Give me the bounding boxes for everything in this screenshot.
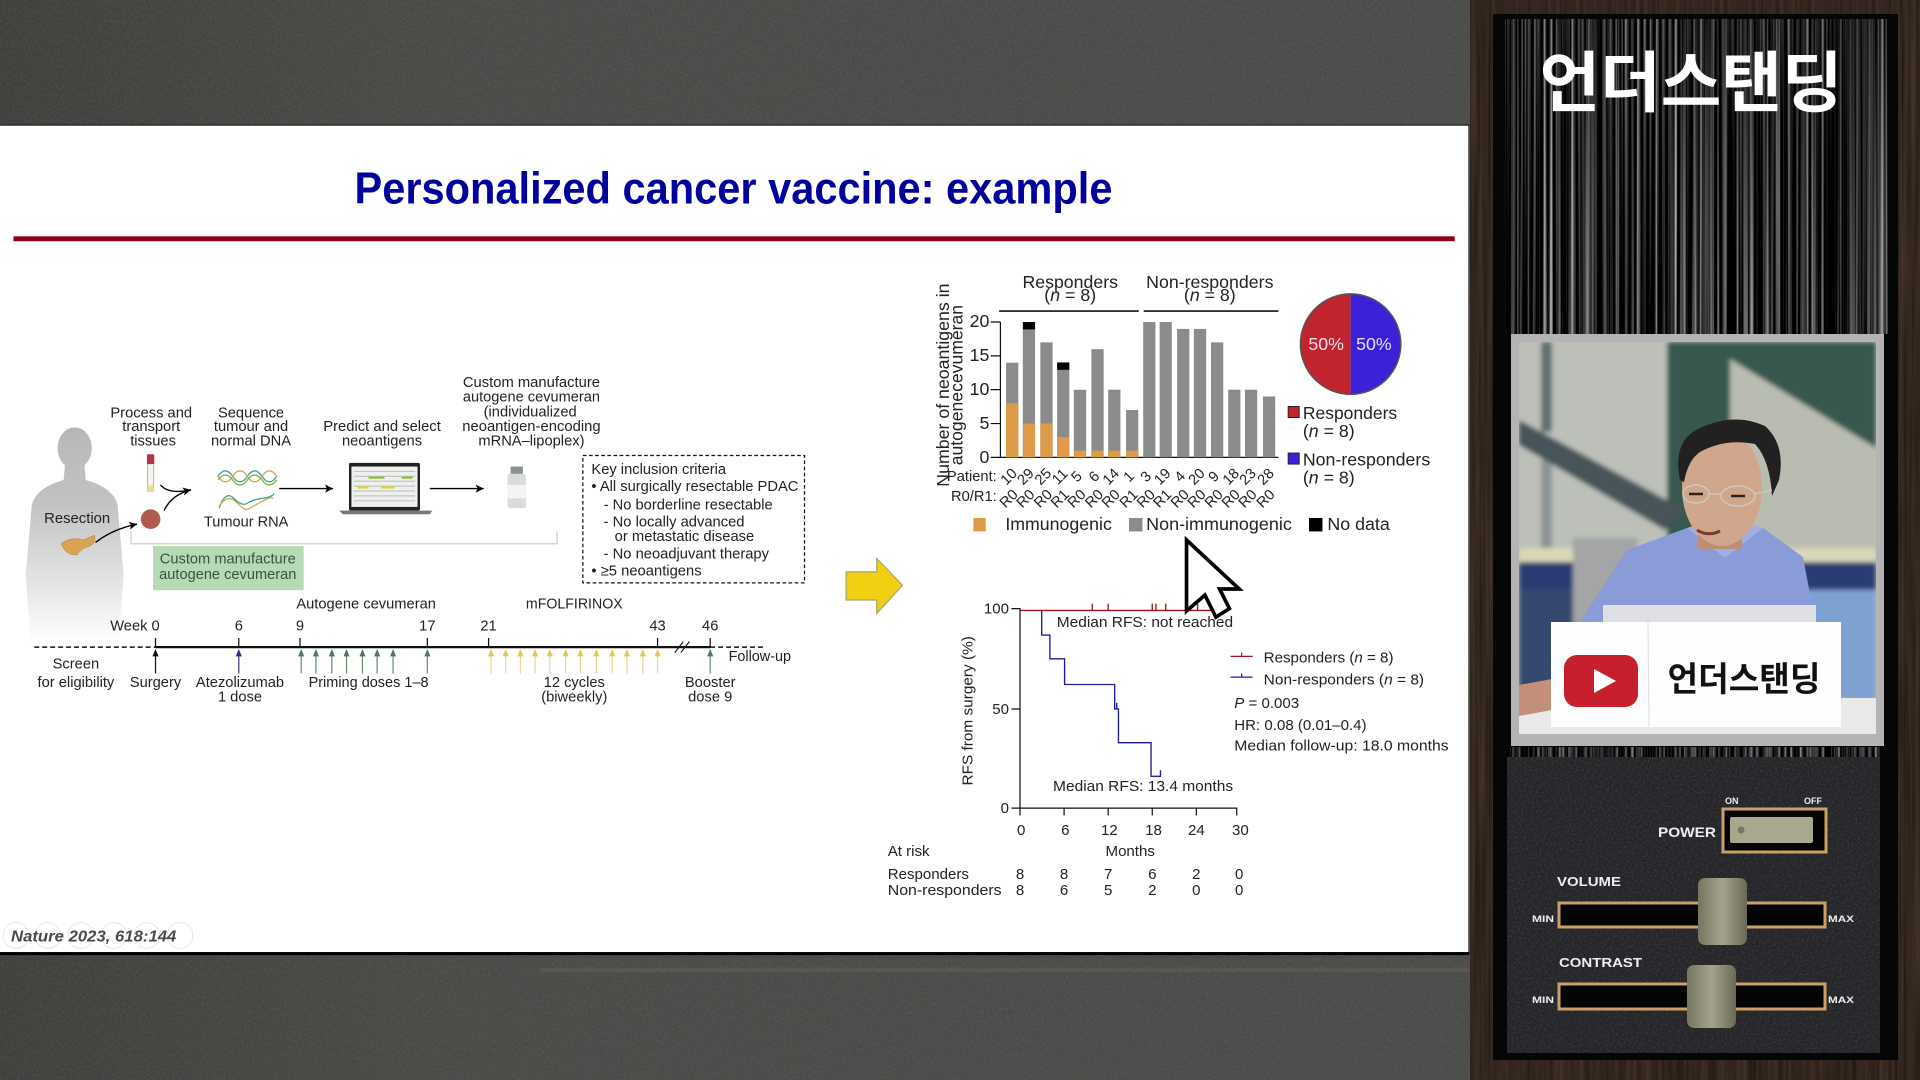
- week labels: 21: [480, 619, 497, 635]
- presenter: [1580, 419, 1813, 625]
- at-risk table: 6: [1060, 882, 1068, 899]
- icon: pancreas: [61, 535, 95, 555]
- patient labels: 5: [1069, 469, 1086, 486]
- week labels: [110, 619, 718, 635]
- decoration: lower grille: [1507, 747, 1880, 757]
- patient labels: 29: [1015, 466, 1038, 489]
- patient labels: Patient:: [947, 469, 997, 485]
- curve legend and statistics: P = 0.003: [1234, 695, 1299, 712]
- patient labels: 18: [1220, 466, 1243, 489]
- at-risk table: Months: [1106, 843, 1155, 860]
- curve annotations: [1053, 614, 1233, 795]
- at-risk table: 7: [1104, 866, 1112, 883]
- resection margin labels: R0: [1202, 487, 1227, 512]
- at-risk table: 2: [1192, 866, 1201, 883]
- volume slider: [1532, 874, 1855, 945]
- power switch: OFF: [1804, 796, 1822, 806]
- label: sequence: Sequence: [218, 406, 284, 422]
- at-risk table: 5: [1104, 882, 1112, 899]
- label: custom manufacture: (individualized: [484, 404, 577, 420]
- resection margin labels: R0: [1065, 487, 1089, 512]
- axis numbers: 18: [1145, 822, 1162, 839]
- at-risk table: 8: [1016, 866, 1024, 883]
- panel: presentation slide: [0, 125, 1469, 955]
- arrow: resection to tissue: [96, 524, 137, 542]
- group headers: Responders: [1022, 272, 1118, 292]
- label: sequence: tumour and: [214, 419, 288, 435]
- patient labels: 11: [1049, 466, 1071, 488]
- patient labels: 3: [1138, 469, 1155, 486]
- axis numbers: 100: [984, 600, 1009, 617]
- panel: webcam video frame: [1511, 334, 1884, 746]
- label: custom manufacture: [462, 375, 601, 450]
- label: process and transport: [110, 406, 192, 450]
- callout: key inclusion criteria: - No neoadjuvant therapy: [604, 546, 770, 562]
- panel: treatment workflow diagram: [26, 375, 804, 643]
- arrow: laptop to vial: [430, 488, 484, 490]
- icon: vaccine vial: [508, 467, 526, 508]
- bars: immunogenic: [1006, 403, 1138, 457]
- resection margin labels: R0: [1031, 487, 1056, 512]
- callout: key inclusion criteria: or metastatic disease: [615, 529, 754, 545]
- drug labels: mFOLFIRINOX: [526, 597, 623, 613]
- callout: custom manufacture box: Custom manufacture: [160, 551, 296, 567]
- label: tumour RNA: Tumour RNA: [204, 515, 289, 531]
- volume slider: MIN: [1532, 914, 1554, 925]
- week labels: 46: [702, 619, 718, 635]
- decoration: speaker grille: [1505, 19, 1888, 334]
- label: sequence: normal DNA: [211, 434, 291, 450]
- resection margin labels: R1: [1151, 487, 1175, 512]
- resection margin labels: [951, 487, 1279, 512]
- group headers: [999, 272, 1278, 311]
- patient labels: 1: [1121, 469, 1138, 486]
- bracket: manufacture span: [131, 531, 557, 544]
- background: dark slate wall: [0, 0, 1480, 1080]
- week labels: 17: [419, 619, 436, 635]
- at-risk table: At risk: [888, 843, 930, 860]
- label: custom manufacture: autogene cevumeran: [463, 390, 600, 406]
- resection margin labels: R0: [1254, 487, 1279, 512]
- drug labels: Autogene cevumeran: [296, 597, 436, 613]
- callout: key inclusion criteria: • All surgically resectable PDAC: [591, 479, 799, 495]
- icon: blood tube: [147, 454, 154, 492]
- non-responders curve: [1042, 611, 1160, 776]
- at-risk table: 0: [1235, 882, 1243, 899]
- y-axis title: Number of neoantigens in: [933, 283, 953, 487]
- y-axis: 15: [970, 345, 990, 365]
- timeline step labels: Priming doses 1–8: [309, 675, 429, 691]
- patient labels: 28: [1255, 466, 1278, 489]
- axis numbers: 0: [1001, 800, 1009, 817]
- curve legend and statistics: HR: 0.08 (0.01–0.4): [1234, 717, 1367, 734]
- pie legend: (n = 8): [1303, 421, 1355, 441]
- group headers: Non-responders: [1146, 272, 1274, 292]
- contrast slider: [1532, 955, 1855, 1028]
- patient labels: 9: [1206, 469, 1223, 486]
- power switch: [1658, 796, 1826, 852]
- patient labels: 14: [1100, 466, 1123, 489]
- resection margin labels: R0: [1134, 487, 1159, 512]
- axis numbers: 24: [1188, 822, 1205, 839]
- contrast slider: MAX: [1828, 995, 1855, 1006]
- timeline step labels: 12 cycles: [544, 675, 605, 691]
- label: process and transport: transport: [122, 419, 180, 435]
- drug labels: [296, 597, 623, 613]
- callout: custom manufacture box: [153, 546, 304, 590]
- patient labels: 25: [1032, 466, 1055, 489]
- at-risk table: 8: [1060, 866, 1068, 883]
- at-risk table: 2: [1148, 882, 1156, 899]
- chart: Kaplan-Meier RFS curve: [888, 600, 1449, 899]
- bar legend: Non-immunogenic: [1146, 514, 1292, 534]
- y-axis: 10: [970, 379, 990, 399]
- hand: [1519, 679, 1552, 716]
- at-risk table: 6: [1148, 866, 1156, 883]
- nameplate text: 언더스탠딩: [1668, 661, 1820, 699]
- patient labels: 23: [1237, 466, 1260, 489]
- callout: key inclusion criteria: Key inclusion criteria: [591, 462, 727, 478]
- resection margin labels: R0: [1099, 487, 1124, 512]
- desk: [1519, 698, 1876, 734]
- nameplate: [1551, 622, 1841, 727]
- y-axis title: RFS from surgery (%): [960, 636, 976, 786]
- arrows: vaccine priming doses: [298, 649, 713, 673]
- icon: YouTube logo: [1564, 655, 1638, 707]
- axis numbers: 50: [992, 701, 1009, 718]
- timeline axis: [34, 638, 765, 653]
- axis numbers: 12: [1101, 822, 1118, 839]
- resection margin labels: R0: [1168, 487, 1193, 512]
- bar legend: [973, 514, 1390, 534]
- power switch: POWER: [1658, 824, 1716, 840]
- bar legend: Immunogenic: [1005, 514, 1112, 534]
- axis numbers: [984, 600, 1249, 839]
- timeline step labels: [38, 649, 791, 706]
- icon: mouse cursor: [1187, 540, 1239, 617]
- axis numbers: 30: [1232, 822, 1249, 839]
- at-risk table: Responders: [888, 866, 969, 883]
- callout: key inclusion criteria: [583, 456, 804, 583]
- laptop lid: [1603, 605, 1816, 623]
- callout: key inclusion criteria: - No borderline resectable: [604, 497, 773, 513]
- label: resection: Resection: [44, 511, 110, 527]
- responders curve: [1020, 604, 1212, 610]
- timeline step labels: Follow-up: [729, 649, 791, 665]
- curve legend and statistics: Median follow-up: 18.0 months: [1234, 738, 1449, 755]
- title: Personalized cancer vaccine: example: [354, 164, 1112, 213]
- resection margin labels: R0: [1219, 487, 1244, 512]
- video backdrop: [1519, 342, 1876, 700]
- curve annotations: Median RFS: 13.4 months: [1053, 778, 1233, 795]
- patient labels: 20: [1186, 466, 1209, 489]
- week labels: Week 0: [110, 619, 160, 635]
- timeline step labels: 1 dose: [218, 690, 262, 706]
- resection margin labels: R1: [1048, 487, 1073, 512]
- patient labels: 19: [1151, 466, 1174, 489]
- resection margin labels: R0: [997, 487, 1022, 512]
- axis numbers: 6: [1061, 822, 1070, 839]
- at-risk table: 0: [1235, 866, 1243, 883]
- panel: retro TV cabinet: [1470, 0, 1920, 1080]
- week labels: 9: [296, 619, 304, 635]
- icon: laptop: [339, 463, 432, 514]
- volume slider: MAX: [1828, 914, 1855, 925]
- icon: tumour tissue: [141, 509, 160, 529]
- resection margin labels: R0: [1185, 487, 1209, 512]
- patient labels: 4: [1172, 469, 1189, 486]
- arrows: chemotherapy cycles: [488, 649, 661, 673]
- panel: treatment timeline: [34, 597, 791, 706]
- contrast slider: CONTRAST: [1559, 955, 1642, 970]
- arrows: surgery and atezolizumab: [152, 649, 242, 673]
- resection margin labels: R0/R1:: [951, 489, 997, 505]
- y-axis: [970, 311, 1278, 467]
- volume slider: VOLUME: [1557, 874, 1621, 889]
- icon: human silhouette: [26, 427, 124, 643]
- y-axis title: [933, 283, 966, 487]
- resection margin labels: R0: [1236, 487, 1261, 512]
- resection margin labels: R0: [1082, 487, 1107, 512]
- y-axis: 5: [980, 413, 990, 433]
- curve legend and statistics: Responders (n = 8): [1264, 649, 1393, 666]
- y-axis title: autogenecevumeran: [946, 305, 966, 465]
- curve legend and statistics: Non-responders ( n = 8): [1264, 671, 1424, 688]
- label: predict and select: [323, 419, 441, 450]
- resection margin labels: R0: [1014, 487, 1038, 512]
- arrows: samples to sequencing: [160, 485, 191, 511]
- label: sequence: [211, 406, 291, 450]
- pie legend: Responders: [1303, 403, 1397, 423]
- at-risk table: 8: [1016, 882, 1024, 899]
- label: process and transport: tissues: [130, 434, 176, 450]
- axes: [1011, 609, 1237, 816]
- timeline step labels: for eligibility: [38, 675, 115, 691]
- bar legend: No data: [1327, 514, 1390, 534]
- power switch: ON: [1725, 796, 1738, 806]
- resection margin labels: R1: [1117, 487, 1142, 512]
- timeline step labels: Surgery: [130, 675, 182, 691]
- pie legend: Non-responders: [1303, 449, 1430, 469]
- icon: DNA helices: [218, 471, 277, 510]
- timeline step labels: (biweekly): [541, 690, 607, 706]
- week labels: 43: [649, 619, 666, 635]
- chart: response pie: 50%: [1308, 334, 1344, 354]
- at-risk table: [888, 843, 1243, 899]
- arrow: yellow transition arrow: [846, 558, 902, 613]
- timeline step labels: Atezolizumab: [196, 675, 284, 691]
- callout: custom manufacture box: autogene cevumeran: [159, 567, 296, 583]
- patient labels: 10: [998, 466, 1021, 489]
- week labels: 6: [235, 619, 243, 635]
- axis numbers: 0: [1017, 822, 1025, 839]
- chart: neoantigen stacked bars: [933, 272, 1390, 534]
- timeline step labels: Booster: [685, 675, 736, 691]
- patient labels: [947, 466, 1278, 489]
- at-risk table: 0: [1192, 882, 1201, 899]
- patient labels: 6: [1086, 469, 1103, 486]
- chart: response pie: 50%: [1356, 334, 1392, 354]
- y-axis: 20: [970, 311, 990, 331]
- at-risk table: Non-responders: [888, 882, 1002, 899]
- label: process and transport: Process and: [110, 406, 192, 422]
- timeline step labels: dose 9: [688, 690, 732, 706]
- pie legend: (n = 8): [1303, 468, 1355, 488]
- callout: key inclusion criteria: • ≥5 neoantigens: [591, 564, 702, 580]
- contrast slider: MIN: [1532, 995, 1554, 1006]
- title rule: [13, 236, 1455, 241]
- label: predict and select: Predict and select: [323, 419, 441, 435]
- panel: control knobs: [1507, 757, 1880, 1053]
- timeline step labels: Screen: [53, 657, 99, 673]
- label: custom manufacture: Custom manufacture: [463, 375, 600, 391]
- bars: non-immunogenic: [1006, 322, 1275, 457]
- y-axis: 0: [980, 447, 990, 467]
- group headers: (n = 8): [1184, 285, 1236, 305]
- heading: channel name: 언더스탠딩: [1540, 46, 1842, 120]
- bars: no data: [1023, 322, 1069, 370]
- curve legend and statistics: [1231, 649, 1449, 755]
- label: predict and select: neoantigens: [342, 434, 422, 450]
- citation: Nature reference: [3, 923, 193, 948]
- curve annotations: Median RFS: not reached: [1057, 614, 1233, 631]
- pie legend: [1288, 403, 1430, 488]
- chart: response pie: [1300, 294, 1401, 394]
- callout: key inclusion criteria: - No locally advanced: [604, 515, 744, 531]
- label: custom manufacture: mRNA–lipoplex): [478, 434, 584, 450]
- label: custom manufacture: neoantigen-encoding: [462, 419, 601, 435]
- citation: Nature reference: Nature 2023, 618:144: [11, 929, 176, 946]
- arrow: sequencing to laptop: [279, 488, 333, 490]
- group headers: (n = 8): [1044, 285, 1096, 305]
